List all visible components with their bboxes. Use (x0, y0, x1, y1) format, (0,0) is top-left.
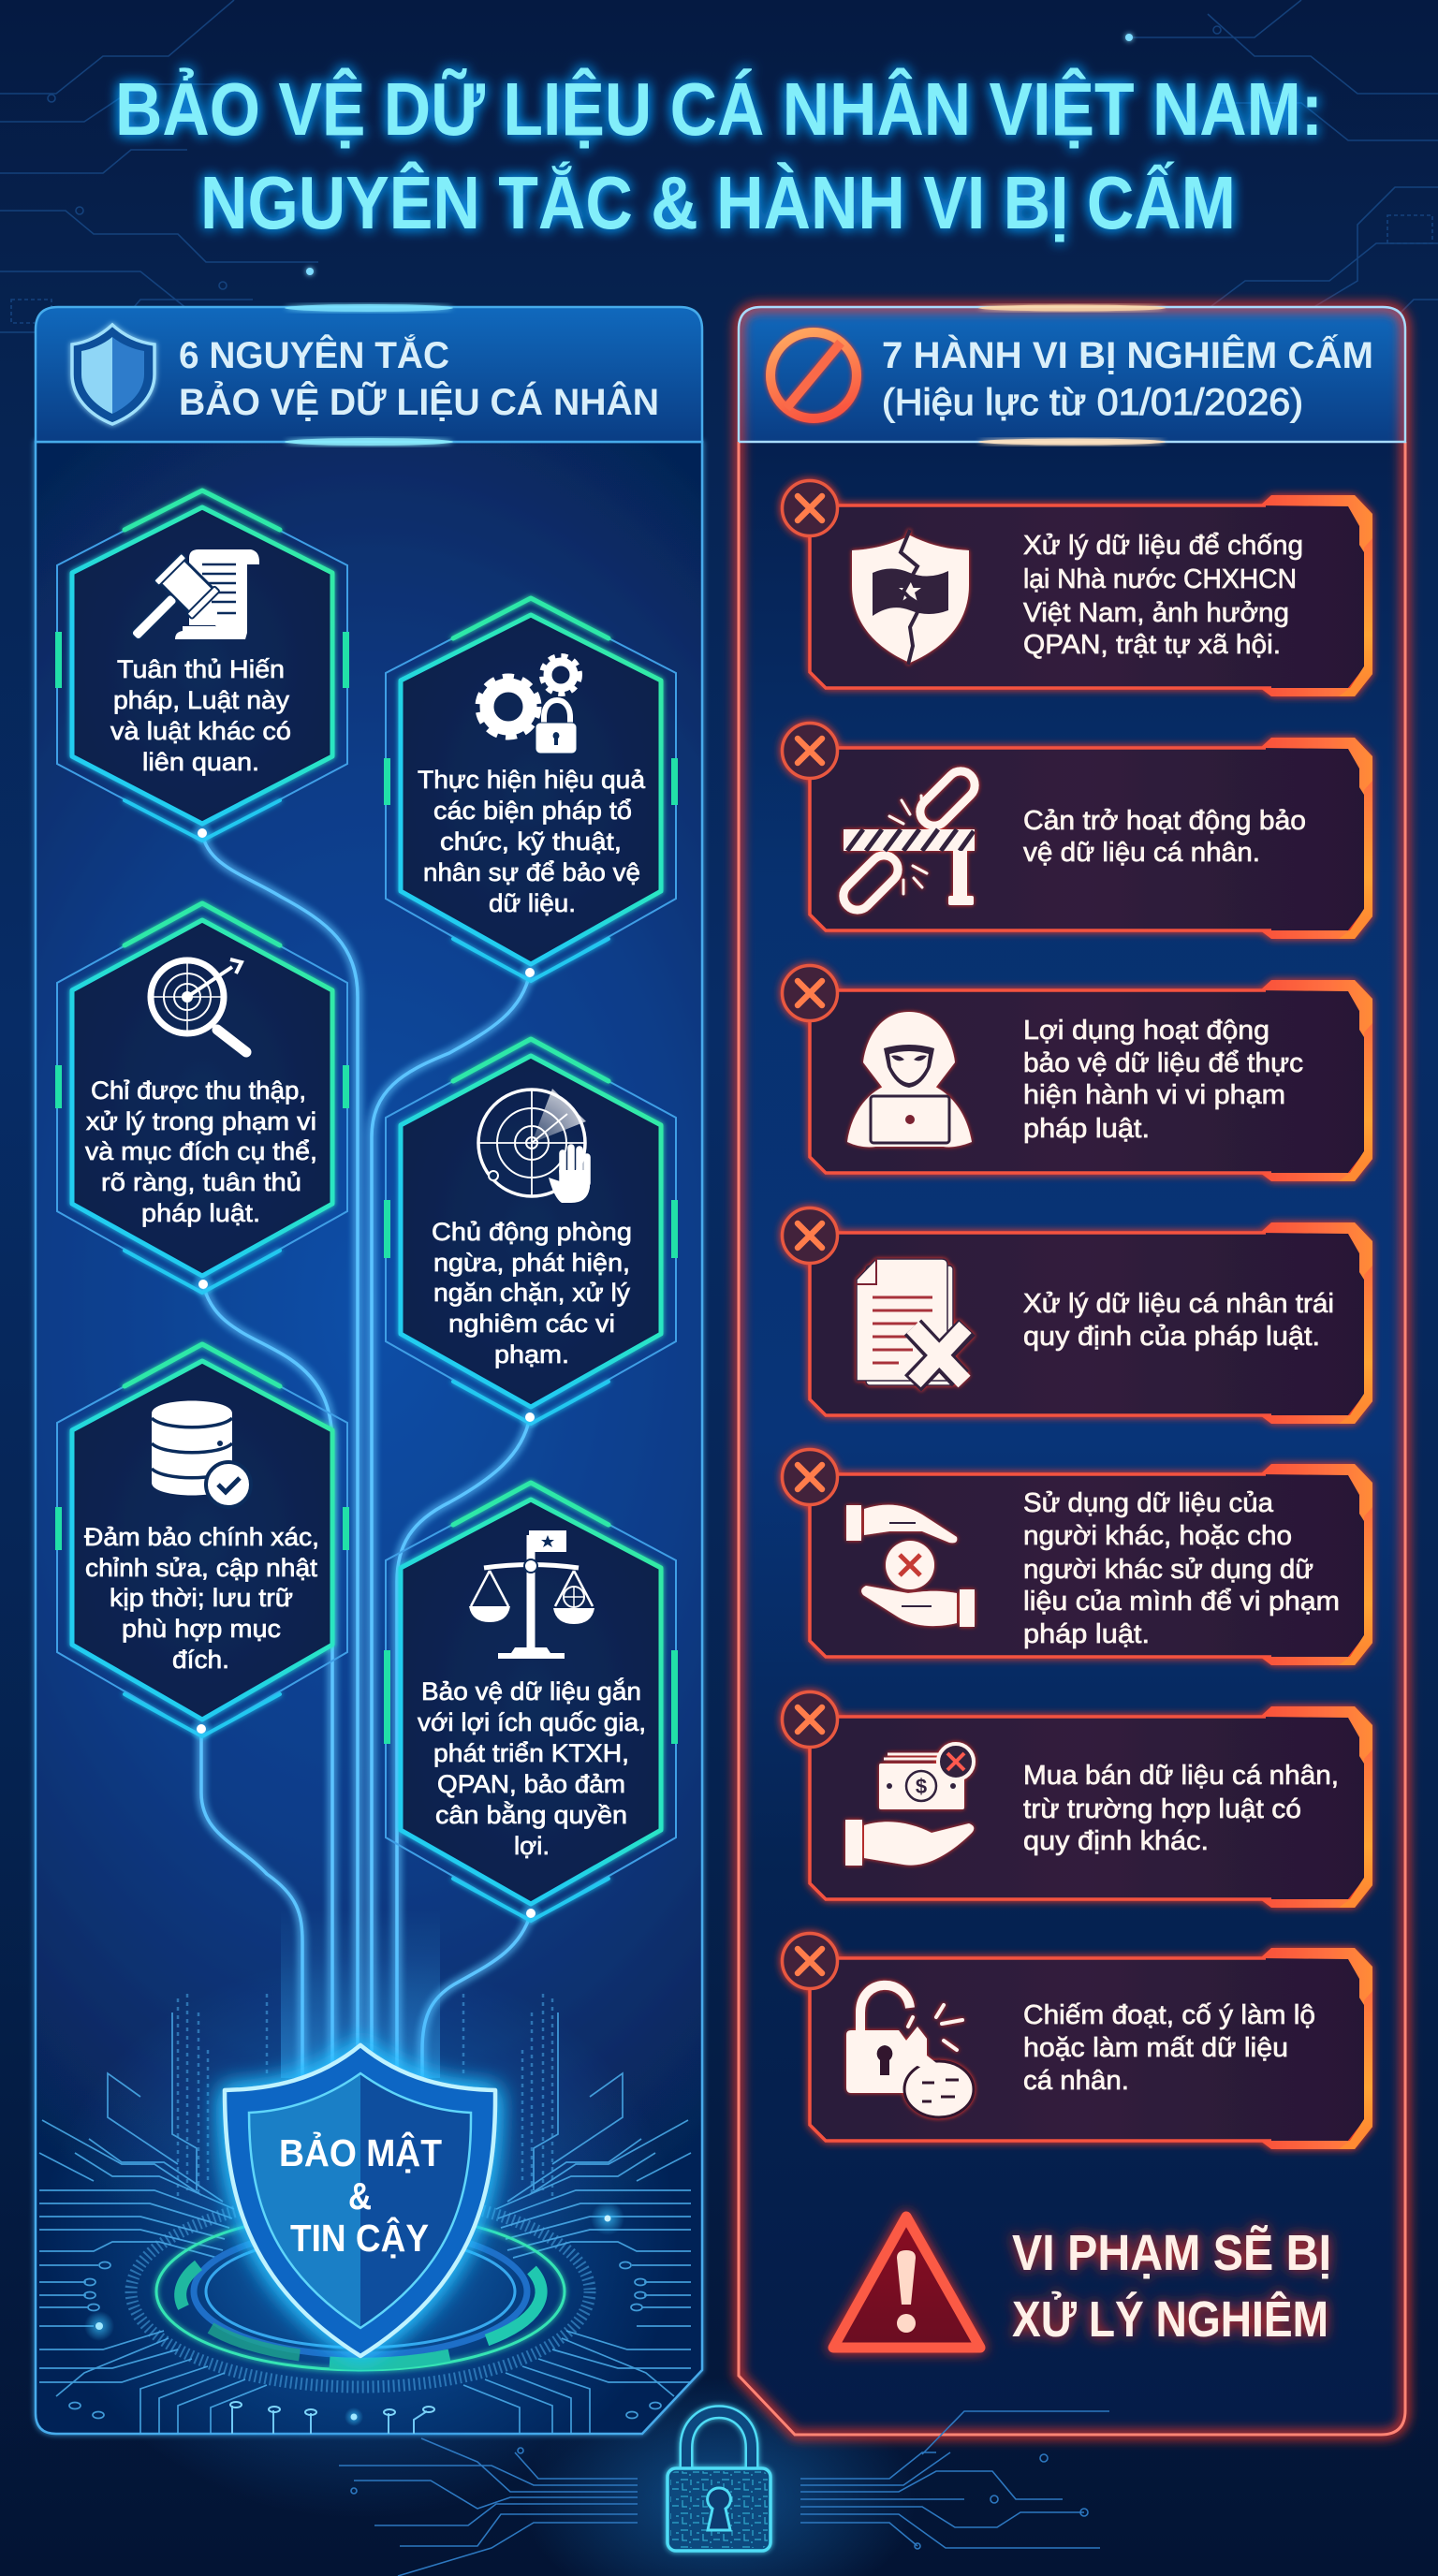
text: phạm. (494, 1340, 569, 1368)
warning text: XỬ LÝ NGHIÊM (1012, 2291, 1328, 2348)
warning text: VI PHẠM SẼ BỊ (1012, 2225, 1331, 2281)
heading: 6 principles: 6 NGUYÊN TẮC (179, 333, 449, 376)
icon: radar and hand (477, 1089, 590, 1203)
text (1023, 2000, 1315, 2096)
text: đích. (172, 1646, 229, 1674)
text: người khác sử dụng dữ (1023, 1555, 1313, 1585)
text: pháp, Luật này (113, 686, 290, 714)
card 1 (783, 481, 1372, 696)
text: QPAN, trật tự xã hội. (1023, 630, 1281, 660)
icon: gears and lock (479, 656, 580, 754)
text (1023, 1016, 1303, 1144)
card 5 (783, 1449, 1372, 1665)
icon: banknotes and hand (845, 1744, 974, 1866)
text: Cản trở hoạt động bảo (1023, 806, 1306, 836)
card 7 (783, 1934, 1372, 2149)
text: quy định khác. (1023, 1826, 1209, 1856)
heading: 7 prohibited acts: 7 HÀNH VI BỊ NGHIÊM CẤM (882, 333, 1373, 376)
card 3 (783, 966, 1372, 1181)
text (85, 1076, 317, 1227)
text: quy định của pháp luật. (1023, 1322, 1320, 1352)
text: Sử dụng dữ liệu của (1023, 1488, 1274, 1518)
icon: padlock (668, 2412, 770, 2551)
text (1023, 531, 1303, 660)
text: Chiếm đoạt, cố ý làm lộ (1023, 2000, 1315, 2030)
principle 5 (384, 1039, 678, 1429)
base ring (131, 2196, 590, 2387)
central shield (225, 2045, 495, 2356)
text: xử lý trong phạm vi (86, 1107, 316, 1135)
text (84, 1523, 319, 1674)
text: chỉnh sửa, cập nhật (85, 1554, 318, 1582)
heading: 6 principles: BẢO VỆ DỮ LIỆU CÁ NHÂN (179, 380, 659, 423)
circuit board around shield (39, 1994, 691, 2434)
warning text (1012, 2225, 1331, 2348)
text: hoặc làm mất dữ liệu (1023, 2033, 1288, 2063)
principle 3 (55, 1344, 349, 1741)
text: pháp luật. (1023, 1114, 1150, 1144)
text: hiện hành vi vi phạm (1023, 1080, 1285, 1110)
principle 4 (384, 598, 678, 985)
text: vệ dữ liệu cá nhân. (1023, 838, 1260, 868)
glowing dots (306, 34, 1133, 275)
heading: 7 prohibited acts: (Hiệu lực từ 01/01/2026) (882, 382, 1303, 423)
icon: document with X (857, 1259, 967, 1385)
text: người khác, hoặc cho (1023, 1521, 1292, 1551)
principle 1 (55, 490, 349, 845)
text: Việt Nam, ảnh hưởng (1023, 598, 1289, 628)
icon: hands with refused coin (846, 1505, 975, 1627)
icon: shield (72, 325, 154, 424)
icon: hacker with laptop (847, 1012, 972, 1147)
text: chức, kỹ thuật, (440, 827, 622, 856)
icon: target and magnifier (148, 959, 246, 1052)
connection lines (201, 833, 531, 2087)
text: Chủ động phòng (432, 1218, 632, 1246)
text (1023, 1488, 1340, 1649)
text: cân bằng quyền (435, 1801, 627, 1829)
principle 6 (384, 1483, 678, 1925)
text (418, 766, 645, 917)
text: và luật khác có (110, 717, 291, 745)
text: rõ ràng, tuân thủ (101, 1168, 301, 1196)
text: pháp luật. (141, 1199, 260, 1227)
text: Đảm bảo chính xác, (84, 1523, 319, 1551)
icon: gavel and scroll (116, 549, 259, 657)
text (1023, 1761, 1339, 1856)
warning icon (833, 2217, 980, 2348)
shield text: & (348, 2174, 372, 2217)
icon: barrier and broken chain (838, 766, 980, 915)
title (115, 67, 1323, 244)
icon: database with check (152, 1400, 251, 1507)
shield text: BẢO MẬT (279, 2131, 442, 2174)
footer circuit traces (339, 2411, 1109, 2576)
light beam above shield (281, 1910, 440, 2078)
text: nghiêm các vi (448, 1310, 615, 1338)
text: Xử lý dữ liệu để chống (1023, 531, 1303, 561)
icon: open lock and stolen bag (846, 1985, 974, 2117)
heading: 7 prohibited acts (882, 333, 1373, 423)
text: Tuân thủ Hiến (117, 655, 285, 683)
panel header (36, 304, 702, 446)
icon: scales with flag and globe (469, 1530, 594, 1659)
text (110, 655, 291, 776)
card 2 (783, 723, 1372, 939)
background circuit traces (0, 0, 1438, 434)
text (1023, 806, 1306, 868)
background glow near lock (522, 2378, 916, 2576)
text: Mua bán dữ liệu cá nhân, (1023, 1761, 1339, 1791)
icon: banknotes and hand: $ (916, 1775, 927, 1798)
text: với lợi ích quốc gia, (418, 1708, 646, 1736)
panel body (36, 442, 702, 2434)
text: ngừa, phát hiện, (433, 1249, 630, 1277)
text (432, 1218, 632, 1368)
text: liệu của mình để vi phạm (1023, 1587, 1340, 1617)
text: và mục đích cụ thể, (85, 1137, 317, 1165)
shield text: TIN CẬY (290, 2217, 429, 2260)
heading: 6 principles (179, 333, 659, 423)
card 6 (783, 1692, 1372, 1908)
text: Bảo vệ dữ liệu gắn (421, 1677, 641, 1705)
principle 2 (55, 903, 349, 1296)
text: lại Nhà nước CHXHCN (1023, 564, 1297, 594)
text: QPAN, bảo đảm (437, 1770, 625, 1798)
text (1023, 1289, 1334, 1352)
text: Thực hiện hiệu quả (418, 766, 645, 794)
panel body (739, 442, 1405, 2435)
glow behind shield (42, 1956, 679, 2518)
text: phù hợp mục (122, 1615, 281, 1643)
panel: 7 prohibited acts (739, 305, 1405, 2435)
text: liên quan. (142, 748, 259, 776)
text: dữ liệu. (489, 889, 576, 917)
panel: 6 principles (36, 304, 702, 2518)
text: kịp thời; lưu trữ (110, 1584, 293, 1612)
text: Xử lý dữ liệu cá nhân trái (1023, 1289, 1334, 1319)
shield text (279, 2131, 442, 2260)
text: trừ trường hợp luật có (1023, 1794, 1301, 1824)
panel header (739, 305, 1405, 2435)
text: bảo vệ dữ liệu để thực (1023, 1048, 1303, 1078)
text: Lợi dụng hoạt động (1023, 1016, 1269, 1046)
icon: prohibited sign (770, 332, 857, 418)
text: ngăn chặn, xử lý (433, 1279, 631, 1307)
text: phát triển KTXH, (433, 1739, 629, 1767)
text (418, 1677, 646, 1860)
icon: broken shield with flag (852, 530, 969, 665)
text: các biện pháp tổ (433, 797, 632, 825)
panel red glow (739, 307, 1405, 2435)
text: pháp luật. (1023, 1619, 1150, 1649)
text: nhân sự để bảo vệ (423, 858, 640, 886)
text: lợi. (514, 1832, 550, 1860)
title: NGUYÊN TẮC & HÀNH VI BỊ CẤM (200, 161, 1236, 244)
text: cá nhân. (1023, 2066, 1129, 2096)
text: Chỉ được thu thập, (91, 1076, 306, 1105)
card 4 (783, 1208, 1372, 1424)
